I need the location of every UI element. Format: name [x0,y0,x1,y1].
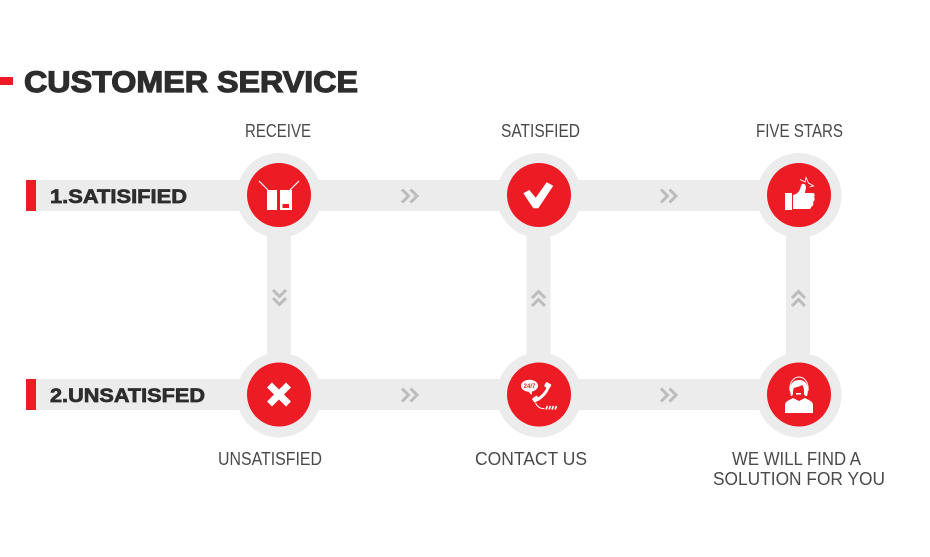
icon: cross [270,385,288,404]
node: solution [756,352,842,438]
icon: 24/7 phone: 24/7 [524,384,536,390]
row 1 label: 1.SATISIFIED [50,186,187,208]
node: five stars [756,153,842,238]
label: contact us: CONTACT US [475,449,587,469]
row 2 label: 2.UNSATISFED [50,385,205,407]
arrow: contact us up to satisfied [532,292,545,306]
label: we will find a solution for you: WE WILL FIND A [732,449,861,469]
node: satisfied [496,153,582,238]
label: unsatisfied: UNSATISFIED [218,449,322,469]
label: we will find a solution for you [713,449,885,489]
arrow: receive to satisfied [402,190,417,202]
label: satisfied: SATISFIED [501,121,580,141]
row 1 label [26,180,187,211]
arrow: satisfied to five stars [661,190,676,202]
label: five stars: FIVE STARS [756,121,843,141]
arrow: solution up to five stars [792,292,805,306]
arrow: contact us to solution [661,388,676,402]
icon: support agent [785,377,813,413]
icon: check mark [523,182,553,208]
node: receive [236,153,322,238]
icon: thumbs up [785,178,815,210]
arrow: unsatisfied to contact us [402,388,417,402]
node: contact us [496,352,582,438]
icon: open box [259,181,299,210]
label: we will find a solution for you: SOLUTION FOR YOU [713,469,885,489]
connector bars [36,180,810,410]
label: receive: RECEIVE [245,121,311,141]
node: unsatisfied [236,352,322,438]
title accent bar [0,77,13,85]
arrow: receive down to unsatisfied [273,290,286,304]
title: CUSTOMER SERVICE [24,66,358,99]
row 2 label [26,379,205,410]
